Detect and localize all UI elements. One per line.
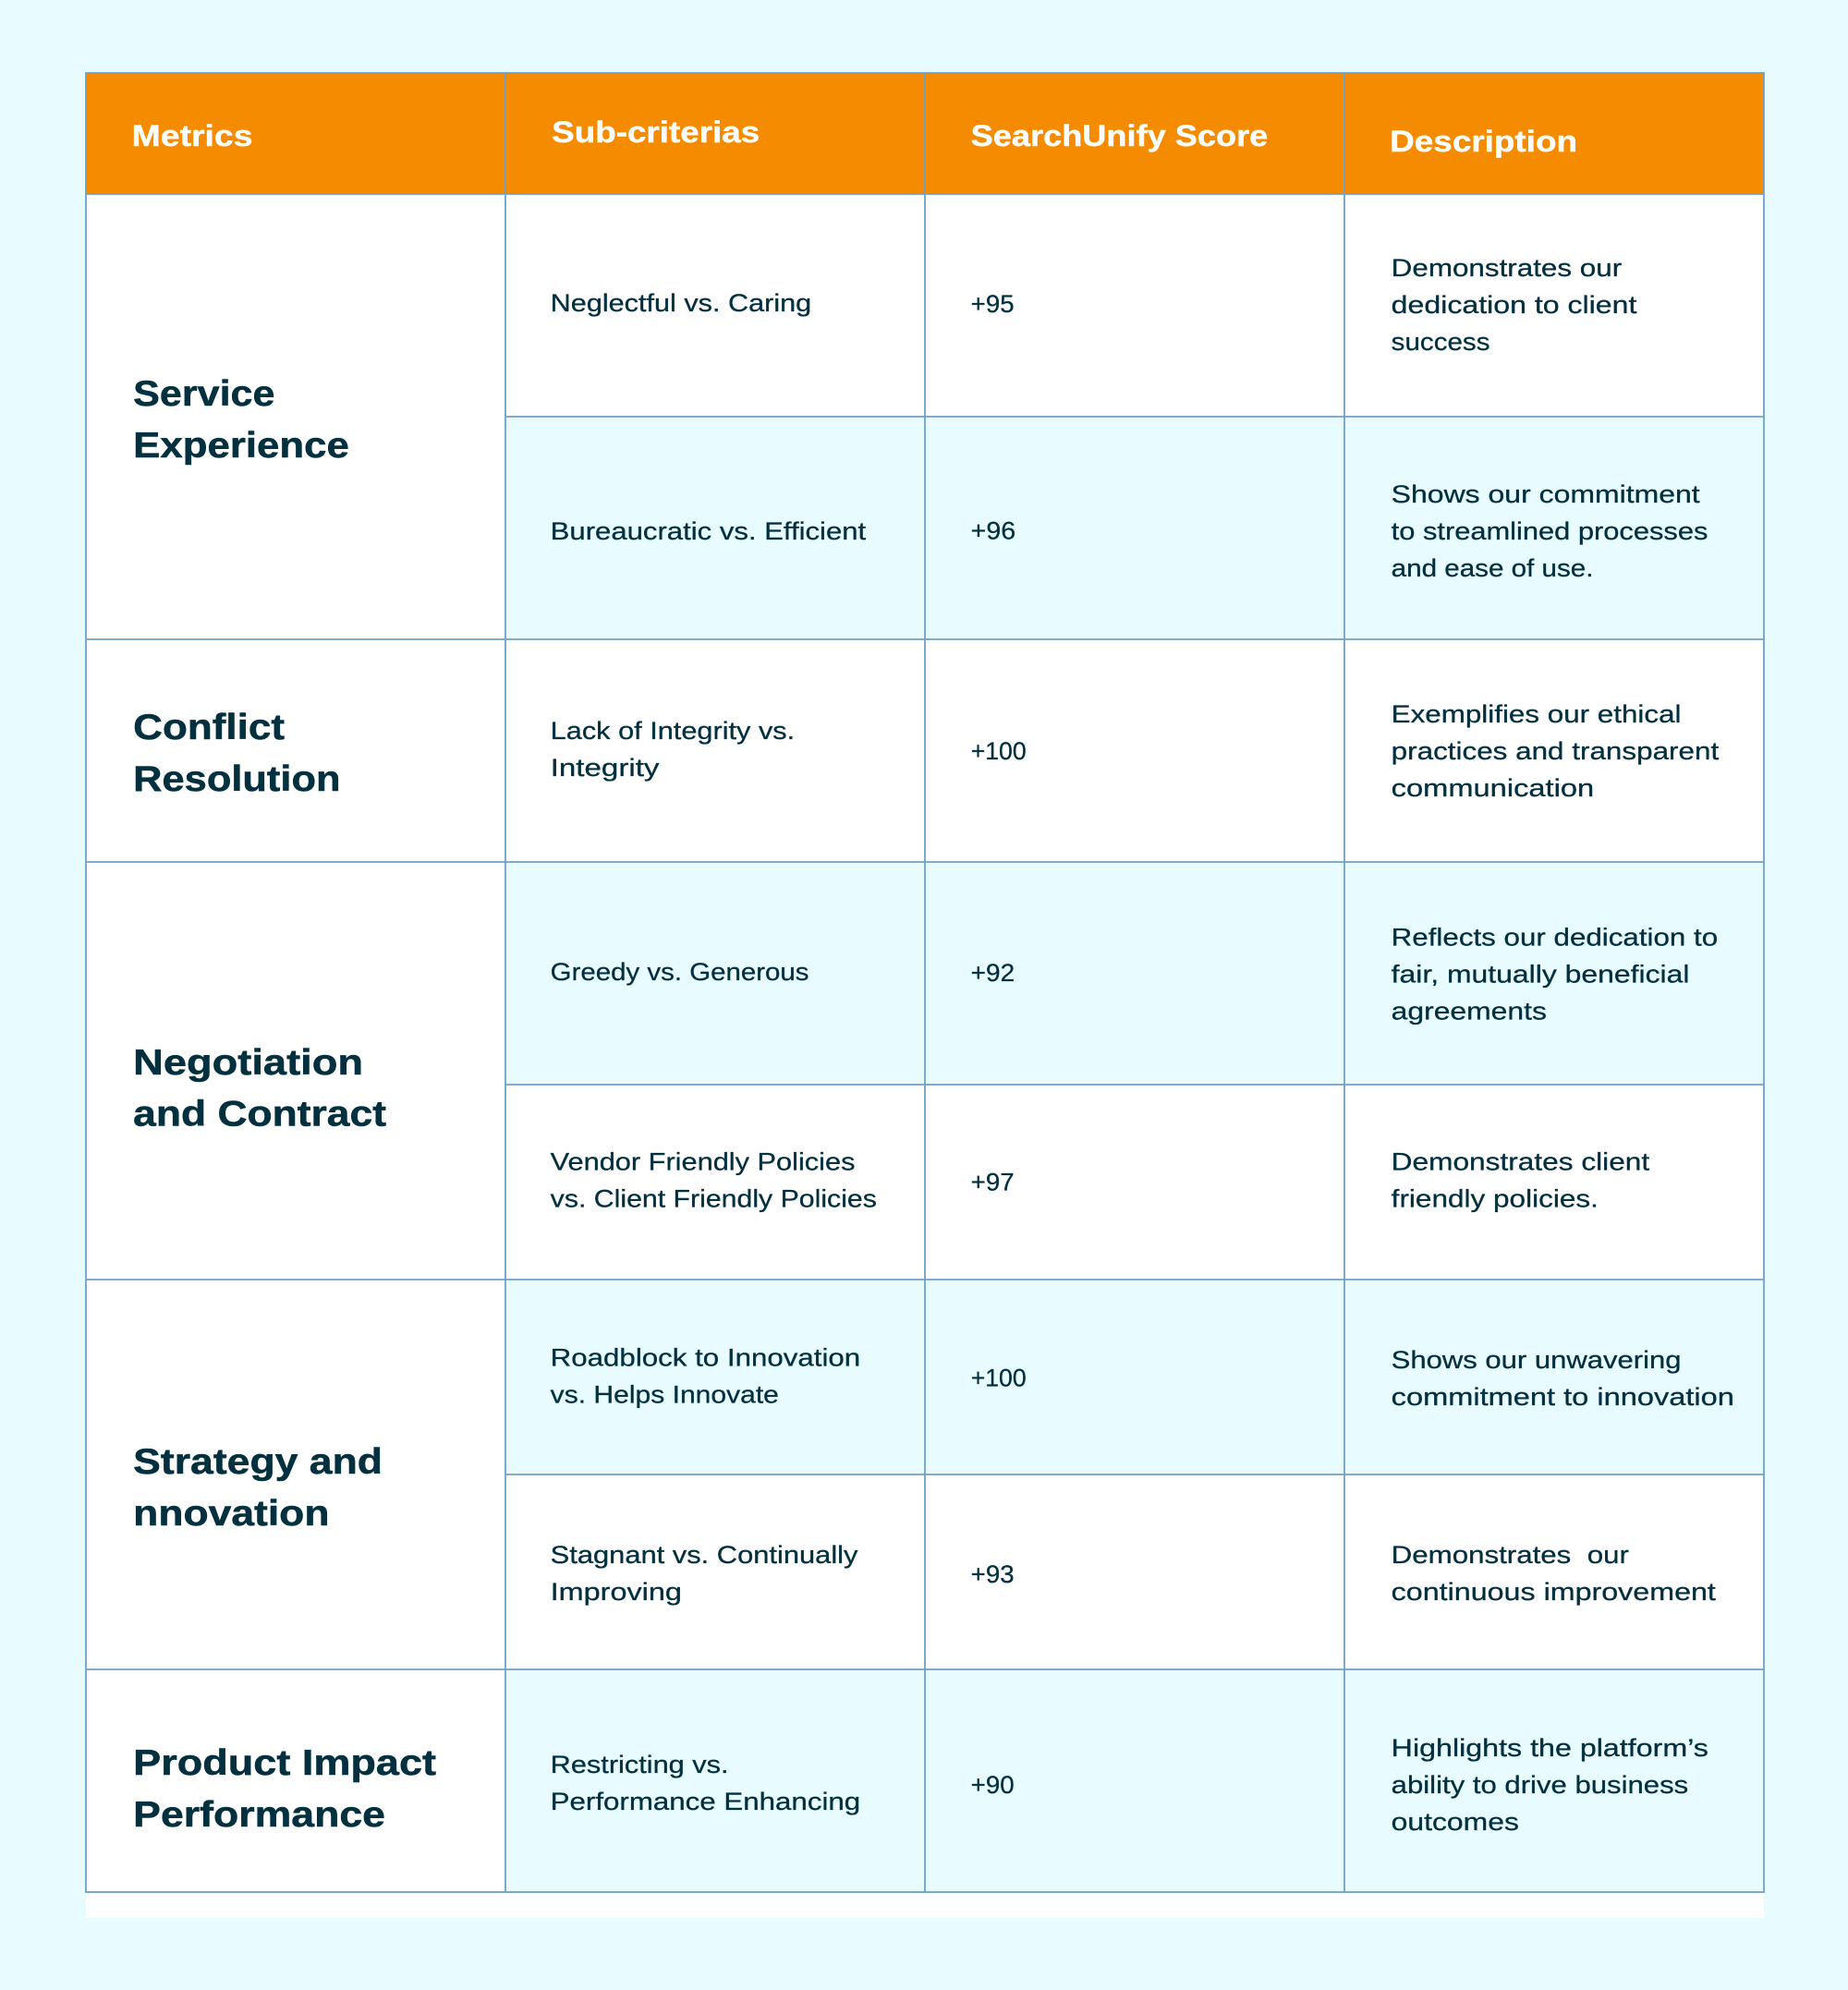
description: client success: dedication to client — [1392, 291, 1637, 319]
metric: Strategy and Innovation: Strategy and — [133, 1442, 383, 1482]
alternating row fills — [505, 417, 1764, 1892]
metric: Service Experience — [133, 374, 349, 466]
description: client success: success — [1392, 328, 1489, 356]
sub-criteria: Lack of Integrity vs. Integrity — [551, 717, 795, 782]
header row — [132, 115, 1577, 158]
score: +95: +95 — [971, 290, 1015, 318]
description: streamlined processes: to streamlined processes — [1392, 517, 1708, 545]
header: SearchUnify Score: SearchUnify Score — [971, 119, 1268, 152]
description: commitment to innovation — [1392, 1346, 1734, 1411]
description: client success: Demonstrates our — [1392, 254, 1622, 282]
sub-criteria: Stagnant vs. Continually Improving — [551, 1541, 858, 1606]
description: streamlined processes: and ease of use. — [1392, 554, 1593, 582]
sub-criteria: Neglectful vs. Caring: Neglectful vs. Caring — [551, 289, 811, 317]
description: business outcomes: ability to drive business — [1392, 1771, 1688, 1799]
sub-criteria: Roadblock to Innovation vs. Helps Innovate — [551, 1343, 860, 1408]
metric: Conflict Resolution: Resolution — [133, 759, 340, 799]
score: +100 conflict: +100 — [971, 737, 1027, 765]
description: ethical practices: communication — [1392, 774, 1594, 802]
sub-criteria: Stagnant vs. Continually Improving: Stagnant vs. Continually — [551, 1541, 858, 1569]
score: +100 innovation: +100 — [971, 1364, 1027, 1391]
sub-criteria: Vendor vs. Client Friendly Policies — [551, 1147, 877, 1212]
score: +90: +90 — [971, 1771, 1015, 1799]
description: client friendly policies — [1392, 1147, 1650, 1212]
description: ethical practices — [1392, 700, 1720, 802]
description: business outcomes: outcomes — [1392, 1808, 1519, 1836]
description: client friendly policies: friendly policies. — [1392, 1184, 1599, 1212]
header: Metrics: Metrics — [132, 119, 253, 152]
metric: Strategy and Innovation: nnovation — [133, 1494, 329, 1534]
sub-criteria: Lack of Integrity vs. Integrity: Integrity — [551, 754, 660, 782]
metric: Service Experience: Service — [133, 374, 275, 414]
description: streamlined processes: Shows our commitment — [1392, 480, 1700, 508]
sub-criteria: Vendor vs. Client Friendly Policies: vs. Client Friendly Policies — [551, 1184, 877, 1212]
metric: Conflict Resolution — [133, 708, 340, 799]
metric: Strategy and Innovation — [133, 1442, 383, 1534]
description: business outcomes — [1392, 1734, 1708, 1836]
sub-criteria: Restricting vs. Performance Enhancing: Performance Enhancing — [551, 1788, 860, 1815]
description: continuous improvement: Demonstrates our — [1392, 1541, 1629, 1569]
sub-criteria: Roadblock to Innovation vs. Helps Innovate: Roadblock to Innovation — [551, 1343, 860, 1371]
metric: Negotiation and Contract: Negotiation — [133, 1043, 363, 1083]
description: fair agreements — [1392, 924, 1718, 1025]
metric: Negotiation and Contract — [133, 1043, 386, 1135]
sub-criteria: Lack of Integrity vs. Integrity: Lack of Integrity vs. — [551, 717, 795, 745]
score: +96: +96 — [971, 517, 1015, 545]
metric: Product Impact Performance: Performance — [133, 1795, 385, 1835]
description: ethical practices: practices and transparent — [1392, 737, 1720, 765]
metric: Product Impact Performance: Product Impact — [133, 1743, 436, 1783]
score: +92: +92 — [971, 959, 1015, 987]
description: ethical practices: Exemplifies our ethical — [1392, 700, 1682, 728]
description: client success — [1392, 254, 1637, 356]
description: fair agreements: agreements — [1392, 998, 1547, 1025]
metric: Conflict Resolution: Conflict — [133, 708, 285, 747]
description: fair agreements: fair, mutually beneficial — [1392, 961, 1689, 989]
description: business outcomes: Highlights the platform’s — [1392, 1734, 1708, 1762]
sub-criteria: Restricting vs. Performance Enhancing — [551, 1751, 860, 1815]
sub-criteria: Greedy vs. Generous: Greedy vs. Generous — [551, 958, 809, 986]
header row background — [86, 73, 1764, 194]
metric: Product Impact Performance — [133, 1743, 436, 1835]
header: Description: Description — [1390, 125, 1577, 158]
description: continuous improvement — [1392, 1541, 1716, 1606]
description: commitment to innovation: commitment to innovation — [1392, 1383, 1734, 1411]
description: streamlined processes — [1392, 480, 1708, 582]
description: client friendly policies: Demonstrates client — [1392, 1147, 1650, 1175]
sub-criteria: Vendor vs. Client Friendly Policies: Vendor Friendly Policies — [551, 1147, 856, 1175]
description: fair agreements: Reflects our dedication to — [1392, 924, 1718, 952]
sub-criteria: Roadblock to Innovation vs. Helps Innovate: vs. Helps Innovate — [551, 1380, 779, 1408]
description: commitment to innovation: Shows our unwavering — [1392, 1346, 1682, 1374]
description: continuous improvement: continuous improvement — [1392, 1578, 1716, 1606]
metric: Negotiation and Contract: and Contract — [133, 1094, 386, 1135]
metric: Service Experience: Experience — [133, 426, 349, 466]
score: +93: +93 — [971, 1560, 1015, 1588]
sub-criteria: Bureaucratic vs. Efficient: Bureaucratic vs. Efficient — [551, 517, 867, 545]
score: +97: +97 — [971, 1168, 1015, 1195]
sub-criteria: Stagnant vs. Continually Improving: Improving — [551, 1578, 682, 1606]
header: Sub-criterias: Sub-criterias — [552, 115, 760, 149]
sub-criteria: Restricting vs. Performance Enhancing: Restricting vs. — [551, 1751, 728, 1778]
